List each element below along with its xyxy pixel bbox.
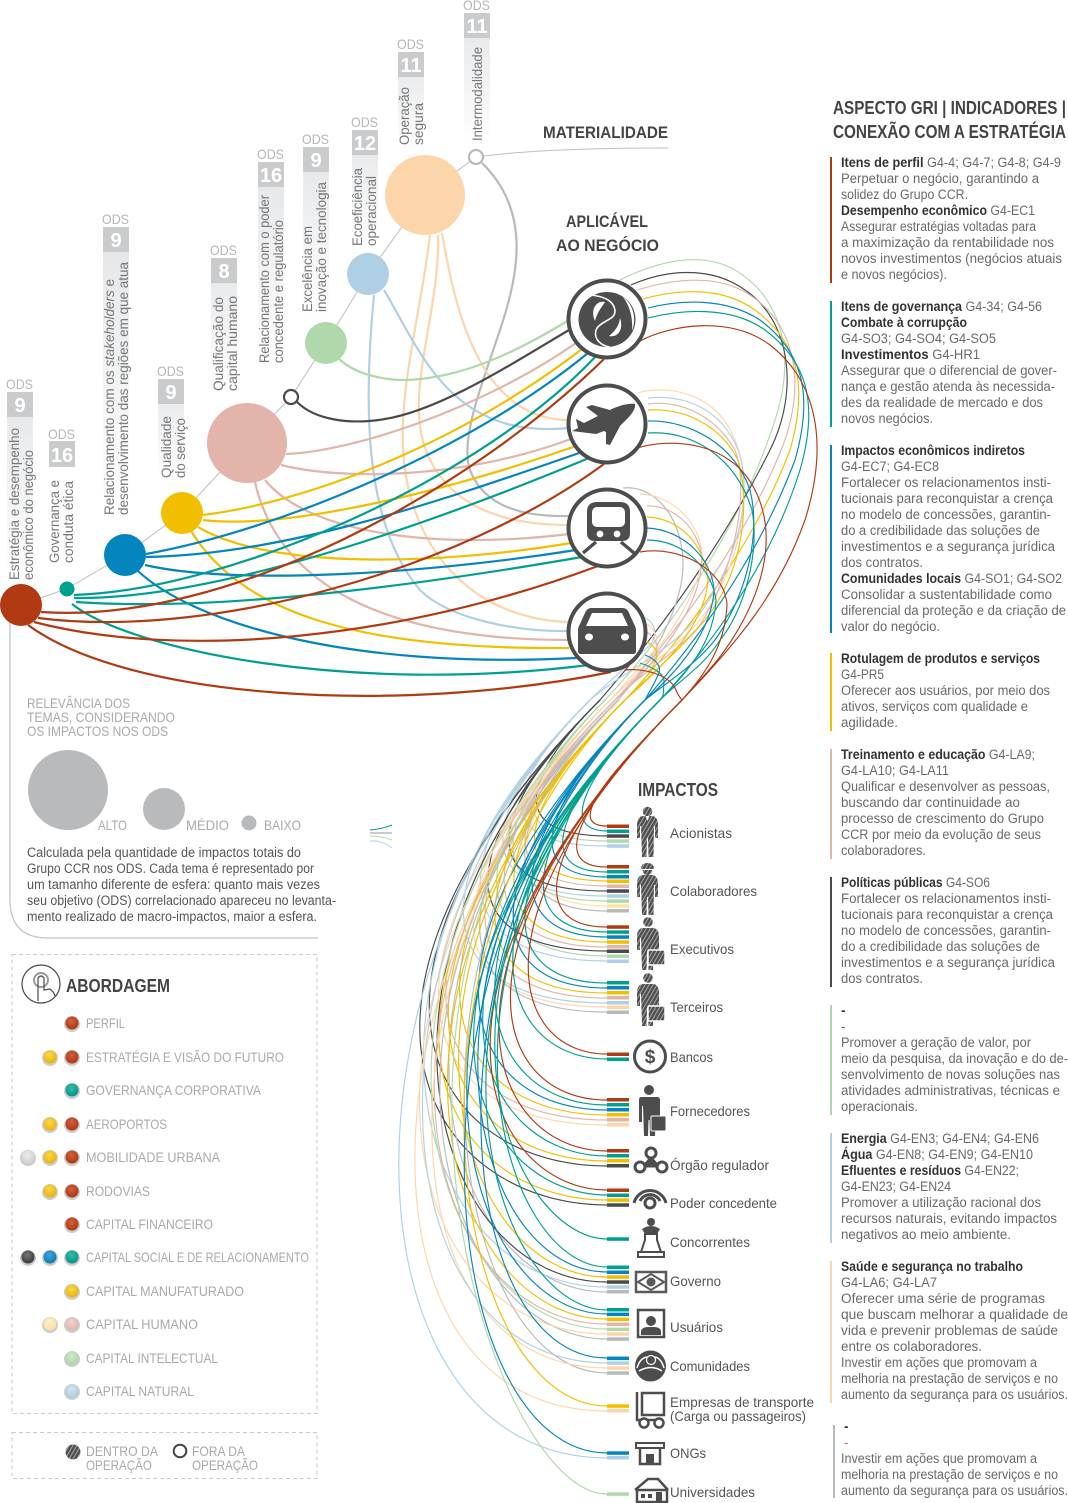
impact: ongs: ONGs bbox=[670, 1445, 706, 1461]
heading: aplicavel ao negocio: AO NEGÓCIO bbox=[556, 236, 659, 255]
row: mobilidade bbox=[20, 1149, 221, 1166]
text block: geracao de valor bbox=[830, 1003, 1068, 1115]
text block: perfil e desempenho bbox=[830, 155, 1062, 283]
row: capital natural: CAPITAL NATURAL bbox=[86, 1383, 194, 1399]
heading: aspecto gri bbox=[833, 98, 1066, 142]
icon: airplane bbox=[568, 386, 646, 462]
label: operacao segura: segura bbox=[410, 103, 426, 145]
text block: impactos economicos: no modelo de concessões, garantin- bbox=[841, 507, 1051, 522]
icon: car bbox=[568, 594, 646, 670]
text block: impactos economicos: Fortalecer os relacionamentos insti- bbox=[841, 475, 1051, 490]
text block: perfil e desempenho: Perpetuar o negócio, garantindo a bbox=[841, 171, 1039, 186]
relevance heading: TEMAS, CONSIDERANDO bbox=[27, 709, 175, 725]
impact: usuarios: Usuários bbox=[670, 1319, 723, 1335]
impact: terceiros: Terceiros bbox=[670, 999, 723, 1015]
row: rodovias bbox=[42, 1183, 150, 1200]
size scale: BAIXO bbox=[264, 817, 301, 833]
text block: governanca: des da realidade de mercado e dos bbox=[841, 395, 1043, 410]
text block: geracao de valor: atividades administrativas, técnicas e bbox=[841, 1083, 1060, 1098]
label: ecoeficiencia: ODS bbox=[351, 114, 378, 130]
label: intermodalidade bbox=[463, 0, 490, 143]
text block: rotulagem: ativos, serviços com qualidade e bbox=[841, 699, 1028, 714]
impact: poder concedente bbox=[607, 1188, 777, 1211]
relevance explanation: um tamanho diferente de esfera: quanto mais vezes bbox=[27, 877, 320, 892]
text block: governanca: Assegurar que o diferencial de gover- bbox=[841, 363, 1057, 378]
text block: energia agua efluentes: Efluentes e resíduos G4-EN22; bbox=[841, 1163, 1019, 1178]
label: poder concedente: concedente e regulatório bbox=[270, 220, 286, 363]
size scale: MÉDIO bbox=[186, 817, 229, 833]
panel: operation legend: OPERAÇÃO bbox=[192, 1457, 258, 1473]
label: operacao segura: 11 bbox=[400, 55, 422, 77]
label: ecoeficiencia bbox=[349, 114, 379, 248]
impact: acionistas bbox=[607, 807, 732, 857]
text block: governanca: Combate à corrupção bbox=[841, 315, 967, 330]
label: qualidade: do serviço bbox=[172, 418, 188, 478]
text block: treinamento: processo de crescimento do Grupo bbox=[841, 811, 1044, 826]
label: poder concedente: Relacionamento com o poder bbox=[256, 195, 272, 363]
curves: materiality themes to business icons bbox=[28, 163, 611, 696]
label: stakeholders: ODS bbox=[102, 211, 129, 227]
label: stakeholders bbox=[101, 211, 131, 517]
impact: orgao regulador bbox=[607, 1148, 769, 1173]
impact: colaboradores bbox=[607, 863, 757, 915]
text block: energia agua efluentes: Promover a utilização racional dos bbox=[841, 1195, 1041, 1210]
text block: politicas publicas: dos contratos. bbox=[841, 971, 923, 986]
materiality nodes bbox=[0, 150, 483, 626]
panel: operation legend bbox=[12, 1432, 317, 1478]
text block: treinamento bbox=[830, 747, 1050, 859]
text block: saude e seguranca: Investir em ações que promovam a bbox=[841, 1355, 1037, 1370]
text block: intermodalidade: - bbox=[844, 1419, 848, 1434]
panel: operation legend: OPERAÇÃO bbox=[86, 1457, 152, 1473]
label: estrategia: 9 bbox=[14, 395, 26, 417]
row: aeroportos bbox=[42, 1116, 167, 1133]
text block: energia agua efluentes: recursos naturais, evitando impactos bbox=[841, 1211, 1057, 1226]
label: qualificacao bbox=[210, 242, 240, 393]
impact: acionistas: Acionistas bbox=[670, 825, 732, 841]
label: excelencia: inovação e tecnologia bbox=[313, 182, 329, 312]
relevance explanation: mento realizado de macro-impactos, maior a esfera. bbox=[27, 909, 317, 924]
label: excelencia bbox=[299, 131, 329, 317]
label: stakeholders: Relacionamento com os stakeholders e bbox=[101, 279, 117, 515]
relevance heading: OS IMPACTOS NOS ODS bbox=[27, 723, 168, 739]
curves: from right side of icons down to the impact bundle bbox=[590, 260, 817, 700]
row: perfil: PERFIL bbox=[86, 1015, 125, 1031]
label: operacao segura bbox=[396, 36, 426, 152]
label: ecoeficiencia: operacional bbox=[363, 176, 379, 246]
text block: politicas publicas: Fortalecer os relacionamentos insti- bbox=[841, 891, 1051, 906]
text block: saude e seguranca bbox=[830, 1259, 1068, 1403]
label: operacao segura: ODS bbox=[397, 36, 424, 52]
text block: politicas publicas bbox=[830, 875, 1055, 987]
relevance explanation: seu objetivo (ODS) correlacionado apareceu no levanta- bbox=[27, 893, 336, 908]
row: capital natural bbox=[64, 1383, 194, 1400]
text block: impactos economicos: Comunidades locais G4-SO1; G4-SO2 bbox=[841, 571, 1062, 586]
impact: colaboradores: Colaboradores bbox=[670, 883, 757, 899]
row: capital social bbox=[20, 1249, 309, 1266]
size scale: ALTO bbox=[98, 817, 127, 833]
text block: treinamento: colaboradores. bbox=[841, 843, 926, 858]
row: governanca: GOVERNANÇA CORPORATIVA bbox=[86, 1082, 262, 1098]
impact: comunidades bbox=[607, 1350, 750, 1382]
text block: politicas publicas: investimentos e a segurança jurídica bbox=[841, 955, 1055, 970]
text block: impactos economicos: valor do negócio. bbox=[841, 619, 940, 634]
row: capital humano bbox=[42, 1316, 198, 1333]
text block: treinamento: Qualificar e desenvolver as pessoas, bbox=[841, 779, 1050, 794]
row: estrategia bbox=[42, 1049, 284, 1066]
label: excelencia: 9 bbox=[310, 150, 322, 172]
impact: fornecedores bbox=[607, 1085, 750, 1136]
label: qualidade: Qualidade bbox=[158, 416, 174, 478]
impact: ongs bbox=[607, 1443, 706, 1464]
text block: rotulagem: Rotulagem de produtos e serviços bbox=[841, 651, 1040, 666]
text block: geracao de valor: Promover a geração de valor, por bbox=[841, 1035, 1031, 1050]
impact: governo: Governo bbox=[670, 1273, 721, 1289]
text block: politicas publicas: do a credibilidade das soluções de bbox=[841, 939, 1040, 954]
text block: rotulagem: G4-PR5 bbox=[841, 667, 884, 682]
impact: bancos: $ bbox=[645, 1047, 656, 1068]
text block: governanca: Investimentos G4-HR1 bbox=[841, 347, 980, 362]
text block: impactos economicos: do a credibilidade das soluções de bbox=[841, 523, 1040, 538]
text block: impactos economicos: Consolidar a sustentabilidade como bbox=[841, 587, 1052, 602]
curves: bundle to impact bars bbox=[399, 700, 682, 1494]
impact: empresas de transporte: (Carga ou passageiros) bbox=[670, 1408, 806, 1424]
label: ecoeficiencia: Ecoeficiência bbox=[349, 168, 365, 246]
impact: concorrentes bbox=[607, 1218, 750, 1257]
text block: saude e seguranca: G4-LA6; G4-LA7 bbox=[841, 1275, 937, 1290]
materiality theme labels bbox=[6, 0, 490, 582]
text block: saude e seguranca: Oferecer uma série de programas bbox=[841, 1291, 1045, 1306]
text block: energia agua efluentes bbox=[830, 1131, 1057, 1243]
stray line fragments bbox=[370, 825, 392, 848]
label: stakeholders: desenvolvimento das regiões em que atua bbox=[115, 262, 131, 515]
text block: perfil e desempenho: a maximização da rentabilidade nos bbox=[841, 235, 1054, 250]
label: intermodalidade: Intermodalidade bbox=[469, 47, 485, 141]
text block: perfil e desempenho: solidez do Grupo CCR. bbox=[841, 187, 968, 202]
impact: orgao regulador: Órgão regulador bbox=[670, 1157, 769, 1173]
text block: treinamento: Treinamento e educação G4-LA9; bbox=[841, 747, 1035, 762]
relevance explanation: Grupo CCR nos ODS. Cada tema é representado por bbox=[27, 861, 314, 876]
text block: saude e seguranca: vida e prevenir problemas de saúde bbox=[841, 1323, 1058, 1338]
text block: governanca: nança e gestão atenda às necessida- bbox=[841, 379, 1055, 394]
text block: saude e seguranca: que buscam melhorar a qualidade de bbox=[841, 1307, 1068, 1322]
text block: perfil e desempenho: Itens de perfil G4-4; G4-7; G4-8; G4-9 bbox=[841, 155, 1061, 170]
label: poder concedente: 16 bbox=[260, 165, 282, 187]
label: qualificacao: ODS bbox=[210, 242, 237, 258]
text block: saude e seguranca: entre os colaboradores. bbox=[841, 1339, 982, 1354]
label: estrategia: Estratégia e desempenho bbox=[6, 428, 22, 580]
text block: impactos economicos: tucionais para reconquistar a crença bbox=[841, 491, 1053, 506]
text block: perfil e desempenho: novos investimentos (negócios atuais bbox=[841, 251, 1062, 266]
heading: aplicavel ao negocio bbox=[556, 212, 659, 255]
text block: geracao de valor: senvolvimento de novas soluções nas bbox=[841, 1067, 1060, 1082]
impact: empresas de transporte: Empresas de transporte bbox=[670, 1394, 814, 1410]
label: estrategia: ODS bbox=[6, 376, 33, 392]
text block: geracao de valor: - bbox=[841, 1019, 846, 1034]
heading: impactos: IMPACTOS bbox=[638, 780, 718, 800]
text block: governanca: Itens de governança G4-34; G4-56 bbox=[841, 299, 1042, 314]
text block: impactos economicos: dos contratos. bbox=[841, 555, 923, 570]
text block: treinamento: buscando dar continuidade ao bbox=[841, 795, 1020, 810]
text block: governanca: novos negócios. bbox=[841, 411, 933, 426]
icon: CCR swirl bbox=[568, 280, 646, 358]
row: perfil bbox=[64, 1015, 125, 1032]
label: qualidade: 9 bbox=[165, 382, 177, 404]
label: qualificacao: 8 bbox=[218, 261, 230, 283]
label: governanca: conduta ética bbox=[60, 481, 76, 563]
text block: energia agua efluentes: G4-EN23; G4-EN24 bbox=[841, 1179, 951, 1194]
text block: impactos economicos bbox=[830, 443, 1066, 634]
text block: impactos economicos: G4-EC7; G4-EC8 bbox=[841, 459, 939, 474]
icon: train bbox=[568, 490, 646, 566]
impact: empresas de transporte bbox=[607, 1392, 814, 1428]
label: poder concedente bbox=[256, 146, 286, 367]
text block: perfil e desempenho: e novos negócios). bbox=[841, 267, 947, 282]
text block: impactos economicos: Impactos econômicos indiretos bbox=[841, 443, 1025, 458]
label: poder concedente: ODS bbox=[257, 146, 284, 162]
materiality backbone line bbox=[21, 148, 668, 605]
label: intermodalidade: 11 bbox=[466, 16, 488, 38]
text block: saude e seguranca: Saúde e segurança no trabalho bbox=[841, 1259, 1023, 1274]
row: mobilidade: MOBILIDADE URBANA bbox=[86, 1149, 221, 1165]
impact: universidades: Universidades bbox=[670, 1484, 755, 1500]
impact: bancos: Bancos bbox=[670, 1049, 713, 1065]
size scale bbox=[28, 750, 301, 833]
impact: executivos bbox=[607, 917, 734, 970]
impact: bancos bbox=[607, 1041, 713, 1072]
impact: fornecedores: Fornecedores bbox=[670, 1103, 750, 1119]
heading: materialidade: MATERIALIDADE bbox=[543, 123, 668, 142]
label: governanca: Governança e bbox=[46, 480, 62, 563]
text block: geracao de valor: - bbox=[841, 1003, 846, 1018]
row: rodovias: RODOVIAS bbox=[86, 1183, 150, 1199]
text block: rotulagem bbox=[830, 651, 1050, 731]
text block: rotulagem: agilidade. bbox=[841, 715, 898, 730]
impact: poder concedente: Poder concedente bbox=[670, 1195, 777, 1211]
label: qualificacao: capital humano bbox=[224, 296, 240, 391]
label: qualidade: ODS bbox=[157, 363, 184, 379]
text block: treinamento: G4-LA10; G4-LA11 bbox=[841, 763, 949, 778]
text block: impactos economicos: investimentos e a segurança jurídica bbox=[841, 539, 1055, 554]
text block: impactos economicos: diferencial da proteção e da criação de bbox=[841, 603, 1066, 618]
impact: universidades bbox=[607, 1479, 755, 1502]
panel: operation legend: DENTRO DA bbox=[86, 1443, 159, 1459]
impact: executivos: Executivos bbox=[670, 941, 734, 957]
row: capital social: CAPITAL SOCIAL E DE RELACIONAMENTO bbox=[86, 1249, 309, 1265]
panel: operation legend: FORA DA bbox=[192, 1443, 246, 1459]
label: qualificacao: Qualificação do bbox=[210, 297, 226, 391]
heading: abordagem: ABORDAGEM bbox=[66, 976, 170, 996]
text block: energia agua efluentes: Água G4-EN8; G4-EN9; G4-EN10 bbox=[841, 1147, 1033, 1162]
label: governanca bbox=[46, 426, 76, 563]
text block: governanca: G4-SO3; G4-SO4; G4-SO5 bbox=[841, 331, 996, 346]
relevance explanation bbox=[27, 845, 336, 924]
row: aeroportos: AEROPORTOS bbox=[86, 1116, 167, 1132]
label: governanca: 16 bbox=[51, 445, 73, 467]
text block: perfil e desempenho: Assegurar estratégias voltadas para bbox=[841, 219, 1036, 234]
panel: abordagem legend bbox=[12, 954, 317, 1414]
text block: treinamento: CCR por meio da evolução de seus bbox=[841, 827, 1041, 842]
text block: perfil e desempenho: Desempenho econômico G4-EC1 bbox=[841, 203, 1035, 218]
text block: geracao de valor: operacionais. bbox=[841, 1099, 918, 1114]
relevance heading: RELEVÂNCIA DOS bbox=[27, 695, 130, 711]
impact: terceiros bbox=[607, 973, 723, 1026]
panel: relevance frame bbox=[10, 620, 318, 938]
impact: comunidades: Comunidades bbox=[670, 1358, 750, 1374]
text block: governanca bbox=[830, 299, 1057, 427]
text block: politicas publicas: Políticas públicas G4-SO6 bbox=[841, 875, 990, 890]
label: qualidade bbox=[157, 363, 188, 479]
text block: politicas publicas: no modelo de concessões, garantin- bbox=[841, 923, 1051, 938]
row: capital humano: CAPITAL HUMANO bbox=[86, 1316, 198, 1332]
text block: rotulagem: Oferecer aos usuários, por meio dos bbox=[841, 683, 1050, 698]
row: capital manufaturado: CAPITAL MANUFATURADO bbox=[86, 1283, 244, 1299]
icon: touch hand bbox=[22, 965, 60, 1003]
label: operacao segura: Operação bbox=[396, 87, 412, 145]
row: capital financeiro: CAPITAL FINANCEIRO bbox=[86, 1216, 213, 1232]
text block: intermodalidade: Investir em ações que promovam a bbox=[841, 1451, 1037, 1466]
text block: intermodalidade bbox=[833, 1419, 1068, 1498]
row: capital intelectual: CAPITAL INTELECTUAL bbox=[86, 1350, 218, 1366]
label: estrategia: econômico do negócio bbox=[20, 450, 36, 580]
heading: aplicavel ao negocio: APLICÁVEL bbox=[566, 212, 648, 231]
text block: energia agua efluentes: Energia G4-EN3; G4-EN4; G4-EN6 bbox=[841, 1131, 1039, 1146]
text block: politicas publicas: tucionais para reconquistar a crença bbox=[841, 907, 1053, 922]
row: estrategia: ESTRATÉGIA E VISÃO DO FUTURO bbox=[86, 1049, 284, 1065]
impact: governo bbox=[607, 1266, 721, 1294]
label: excelencia: Excelência em bbox=[299, 226, 315, 312]
label: excelencia: ODS bbox=[302, 131, 329, 147]
impact: concorrentes: Concorrentes bbox=[670, 1234, 750, 1250]
legend: relevance of themes bbox=[27, 695, 336, 924]
label: estrategia bbox=[6, 376, 36, 582]
text block: intermodalidade: - bbox=[844, 1435, 848, 1450]
text block: energia agua efluentes: negativos ao meio ambiente. bbox=[841, 1227, 1011, 1242]
label: governanca: ODS bbox=[48, 426, 75, 442]
label: stakeholders: 9 bbox=[110, 230, 122, 252]
impact: usuarios bbox=[607, 1308, 723, 1341]
relevance heading bbox=[27, 695, 175, 739]
label: ecoeficiencia: 12 bbox=[354, 133, 376, 155]
relevance explanation: Calculada pela quantidade de impactos totais do bbox=[27, 845, 301, 860]
